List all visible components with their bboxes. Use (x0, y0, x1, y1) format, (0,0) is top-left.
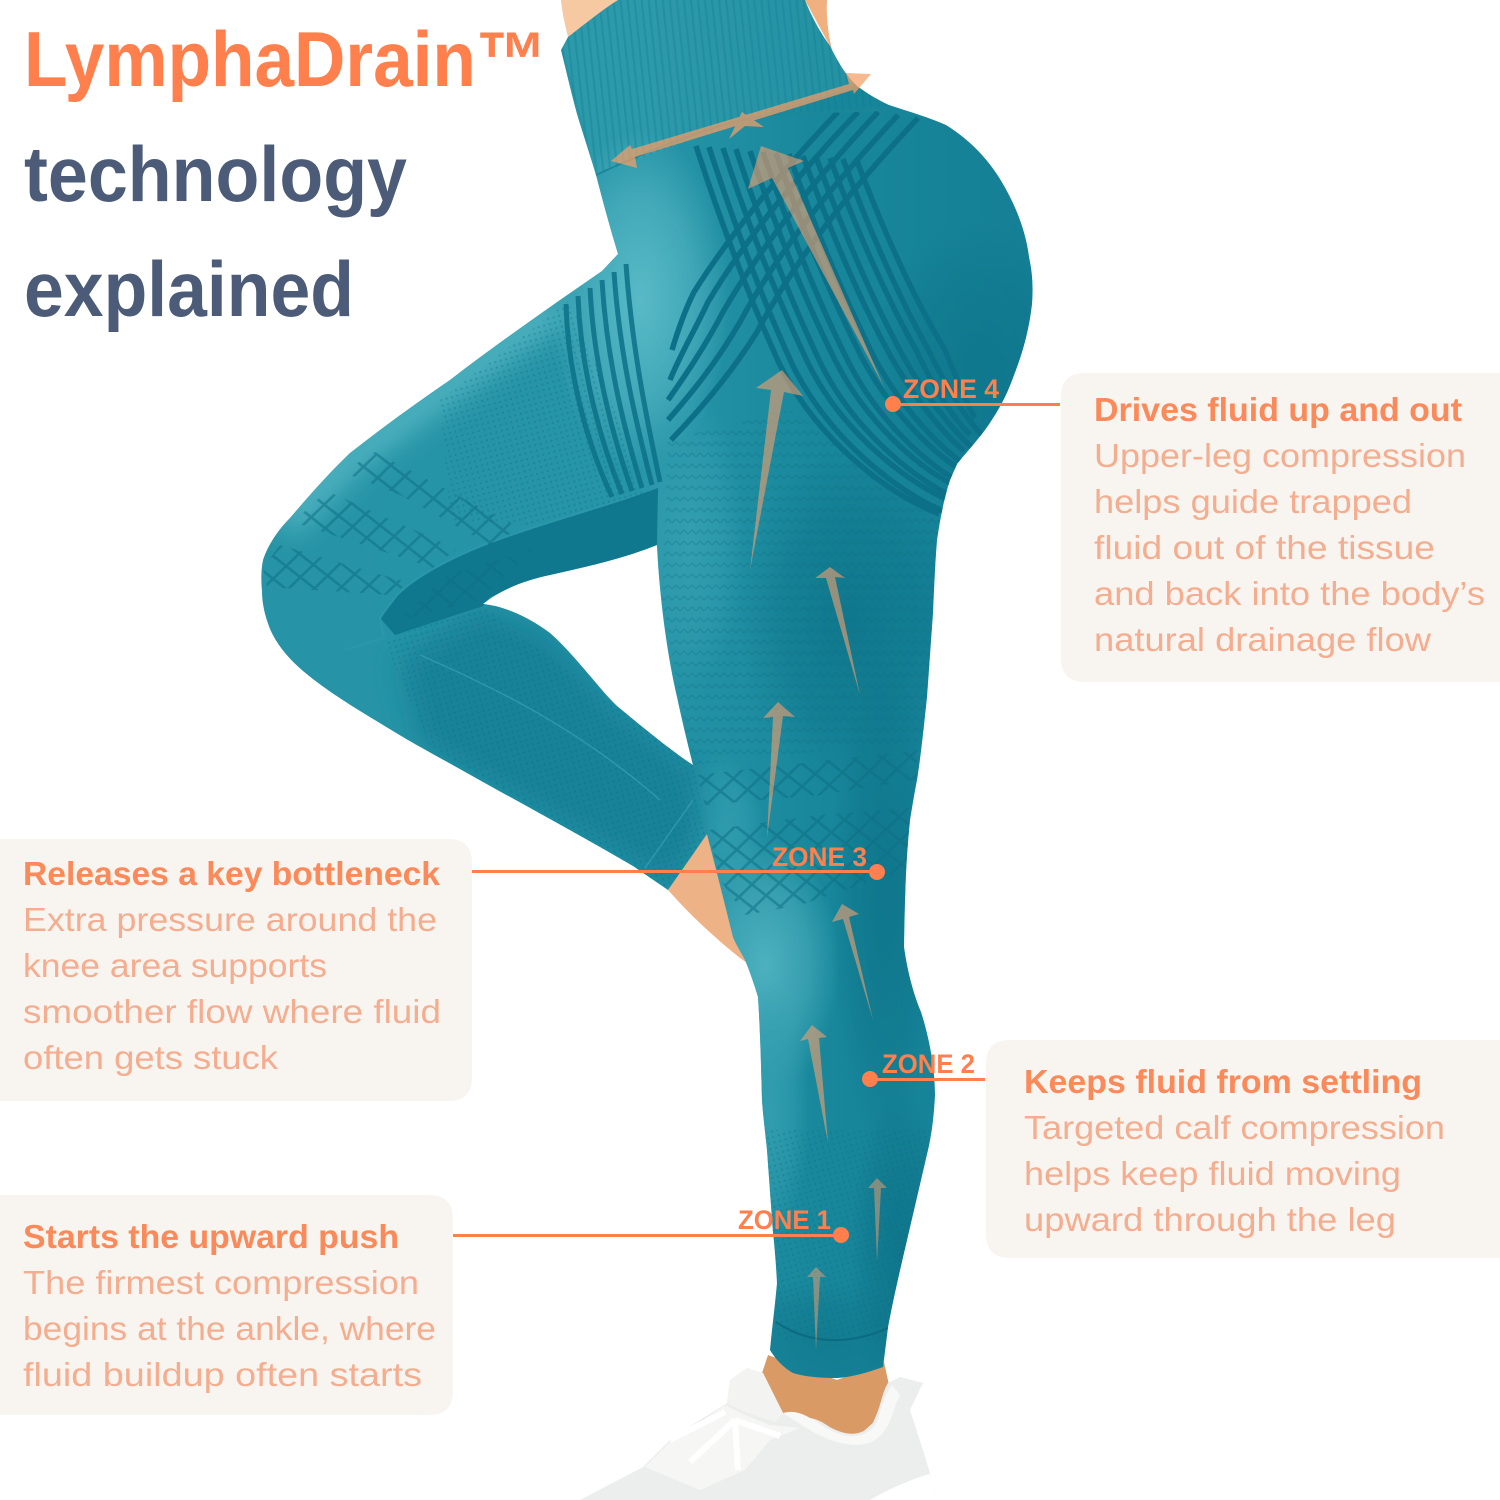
icon: skin at waist (561, 0, 832, 50)
arrow: outer calf (868, 1178, 887, 1262)
card body zone 3: often gets stuck (23, 1039, 279, 1076)
arrow: thigh front (750, 370, 803, 570)
card background zone 3 (0, 839, 472, 1101)
card body zone 1 (23, 1264, 436, 1393)
card body zone 4: natural drainage flow (1094, 621, 1431, 658)
icon: white sneaker (580, 1368, 938, 1500)
card body zone 1: begins at the ankle, where (23, 1310, 436, 1347)
card body zone 4 (1094, 437, 1485, 658)
card body zone 3 (23, 901, 441, 1076)
card body zone 2: Targeted calf compression (1024, 1109, 1445, 1146)
leggings shading (285, 0, 1090, 1410)
card heading zone 2: Keeps fluid from settling (1024, 1063, 1422, 1100)
waistband ribs (561, 0, 889, 175)
card body zone 4: and back into the body’s (1094, 575, 1485, 612)
panel: zone 4 (1061, 373, 1500, 682)
callout: zone 4 marker (885, 374, 1060, 412)
icon: skin of the tucked foot behind the knee (668, 833, 750, 965)
card body zone 1: fluid buildup often starts (23, 1356, 422, 1393)
panel: zone 2 (986, 1040, 1500, 1258)
callout: zone 3 marker: ZONE 3 (772, 842, 867, 872)
arrow: ankle (807, 1267, 826, 1350)
crossing stripes on hip (668, 112, 918, 440)
arrow: upper calf (800, 1025, 828, 1143)
arrow: upper hip (748, 146, 884, 387)
title: LymphaDrain™ (24, 15, 547, 103)
panel: zone 1 (0, 1195, 453, 1415)
arrow: below knee (832, 904, 873, 1020)
card body zone 2: upward through the leg (1024, 1201, 1396, 1238)
compression stripes on raised thigh (566, 264, 660, 497)
arrow: above knee (763, 702, 795, 838)
title: explained (24, 245, 354, 333)
shin seam line (420, 655, 693, 868)
arrow: mid thigh (815, 567, 860, 695)
panel: zone 3 (0, 839, 472, 1101)
card background zone 4 (1061, 373, 1500, 682)
title: technology (24, 130, 407, 218)
card background zone 1 (0, 1195, 453, 1415)
ankle cuff seam (776, 1322, 888, 1340)
arrow: waist double arrow (611, 73, 871, 168)
card body zone 2: helps keep fluid moving (1024, 1155, 1401, 1192)
card body zone 3: smoother flow where fluid (23, 993, 441, 1030)
card background zone 2 (986, 1040, 1500, 1258)
knit mesh texture (388, 302, 867, 1306)
callout: zone 2 marker (862, 1049, 985, 1087)
card body zone 4: helps guide trapped (1094, 483, 1412, 520)
compression stripes on hip, second set (709, 147, 983, 515)
title (24, 15, 547, 333)
leggings base colour (250, 0, 1050, 1400)
diamond knit bands (263, 452, 918, 915)
card heading zone 4: Drives fluid up and out (1094, 391, 1462, 428)
icon: ankle skin (762, 1355, 889, 1437)
card body zone 3: Extra pressure around the (23, 901, 437, 938)
card body zone 3: knee area supports (23, 947, 327, 984)
card body zone 4: fluid out of the tissue (1094, 529, 1435, 566)
callout: zone 2 marker: ZONE 2 (882, 1049, 975, 1079)
card body zone 4: Upper-leg compression (1094, 437, 1466, 474)
compression stripes on hip, first set (696, 146, 975, 514)
card heading zone 1: Starts the upward push (23, 1218, 399, 1255)
shin shading (400, 606, 707, 890)
card body zone 1: The firmest compression (23, 1264, 419, 1301)
callout: zone 4 marker: ZONE 4 (903, 374, 999, 404)
chevron knit on standing thigh (662, 410, 939, 765)
leggings (261, 0, 1033, 1378)
callout: zone 3 marker (472, 842, 885, 880)
card body zone 2 (1024, 1109, 1445, 1238)
callout: zone 1 marker (453, 1205, 849, 1243)
waistband hem (596, 110, 880, 175)
callout: zone 1 marker: ZONE 1 (738, 1205, 831, 1235)
card heading zone 3: Releases a key bottleneck (23, 855, 441, 892)
fabric fold beneath thigh (380, 487, 658, 635)
